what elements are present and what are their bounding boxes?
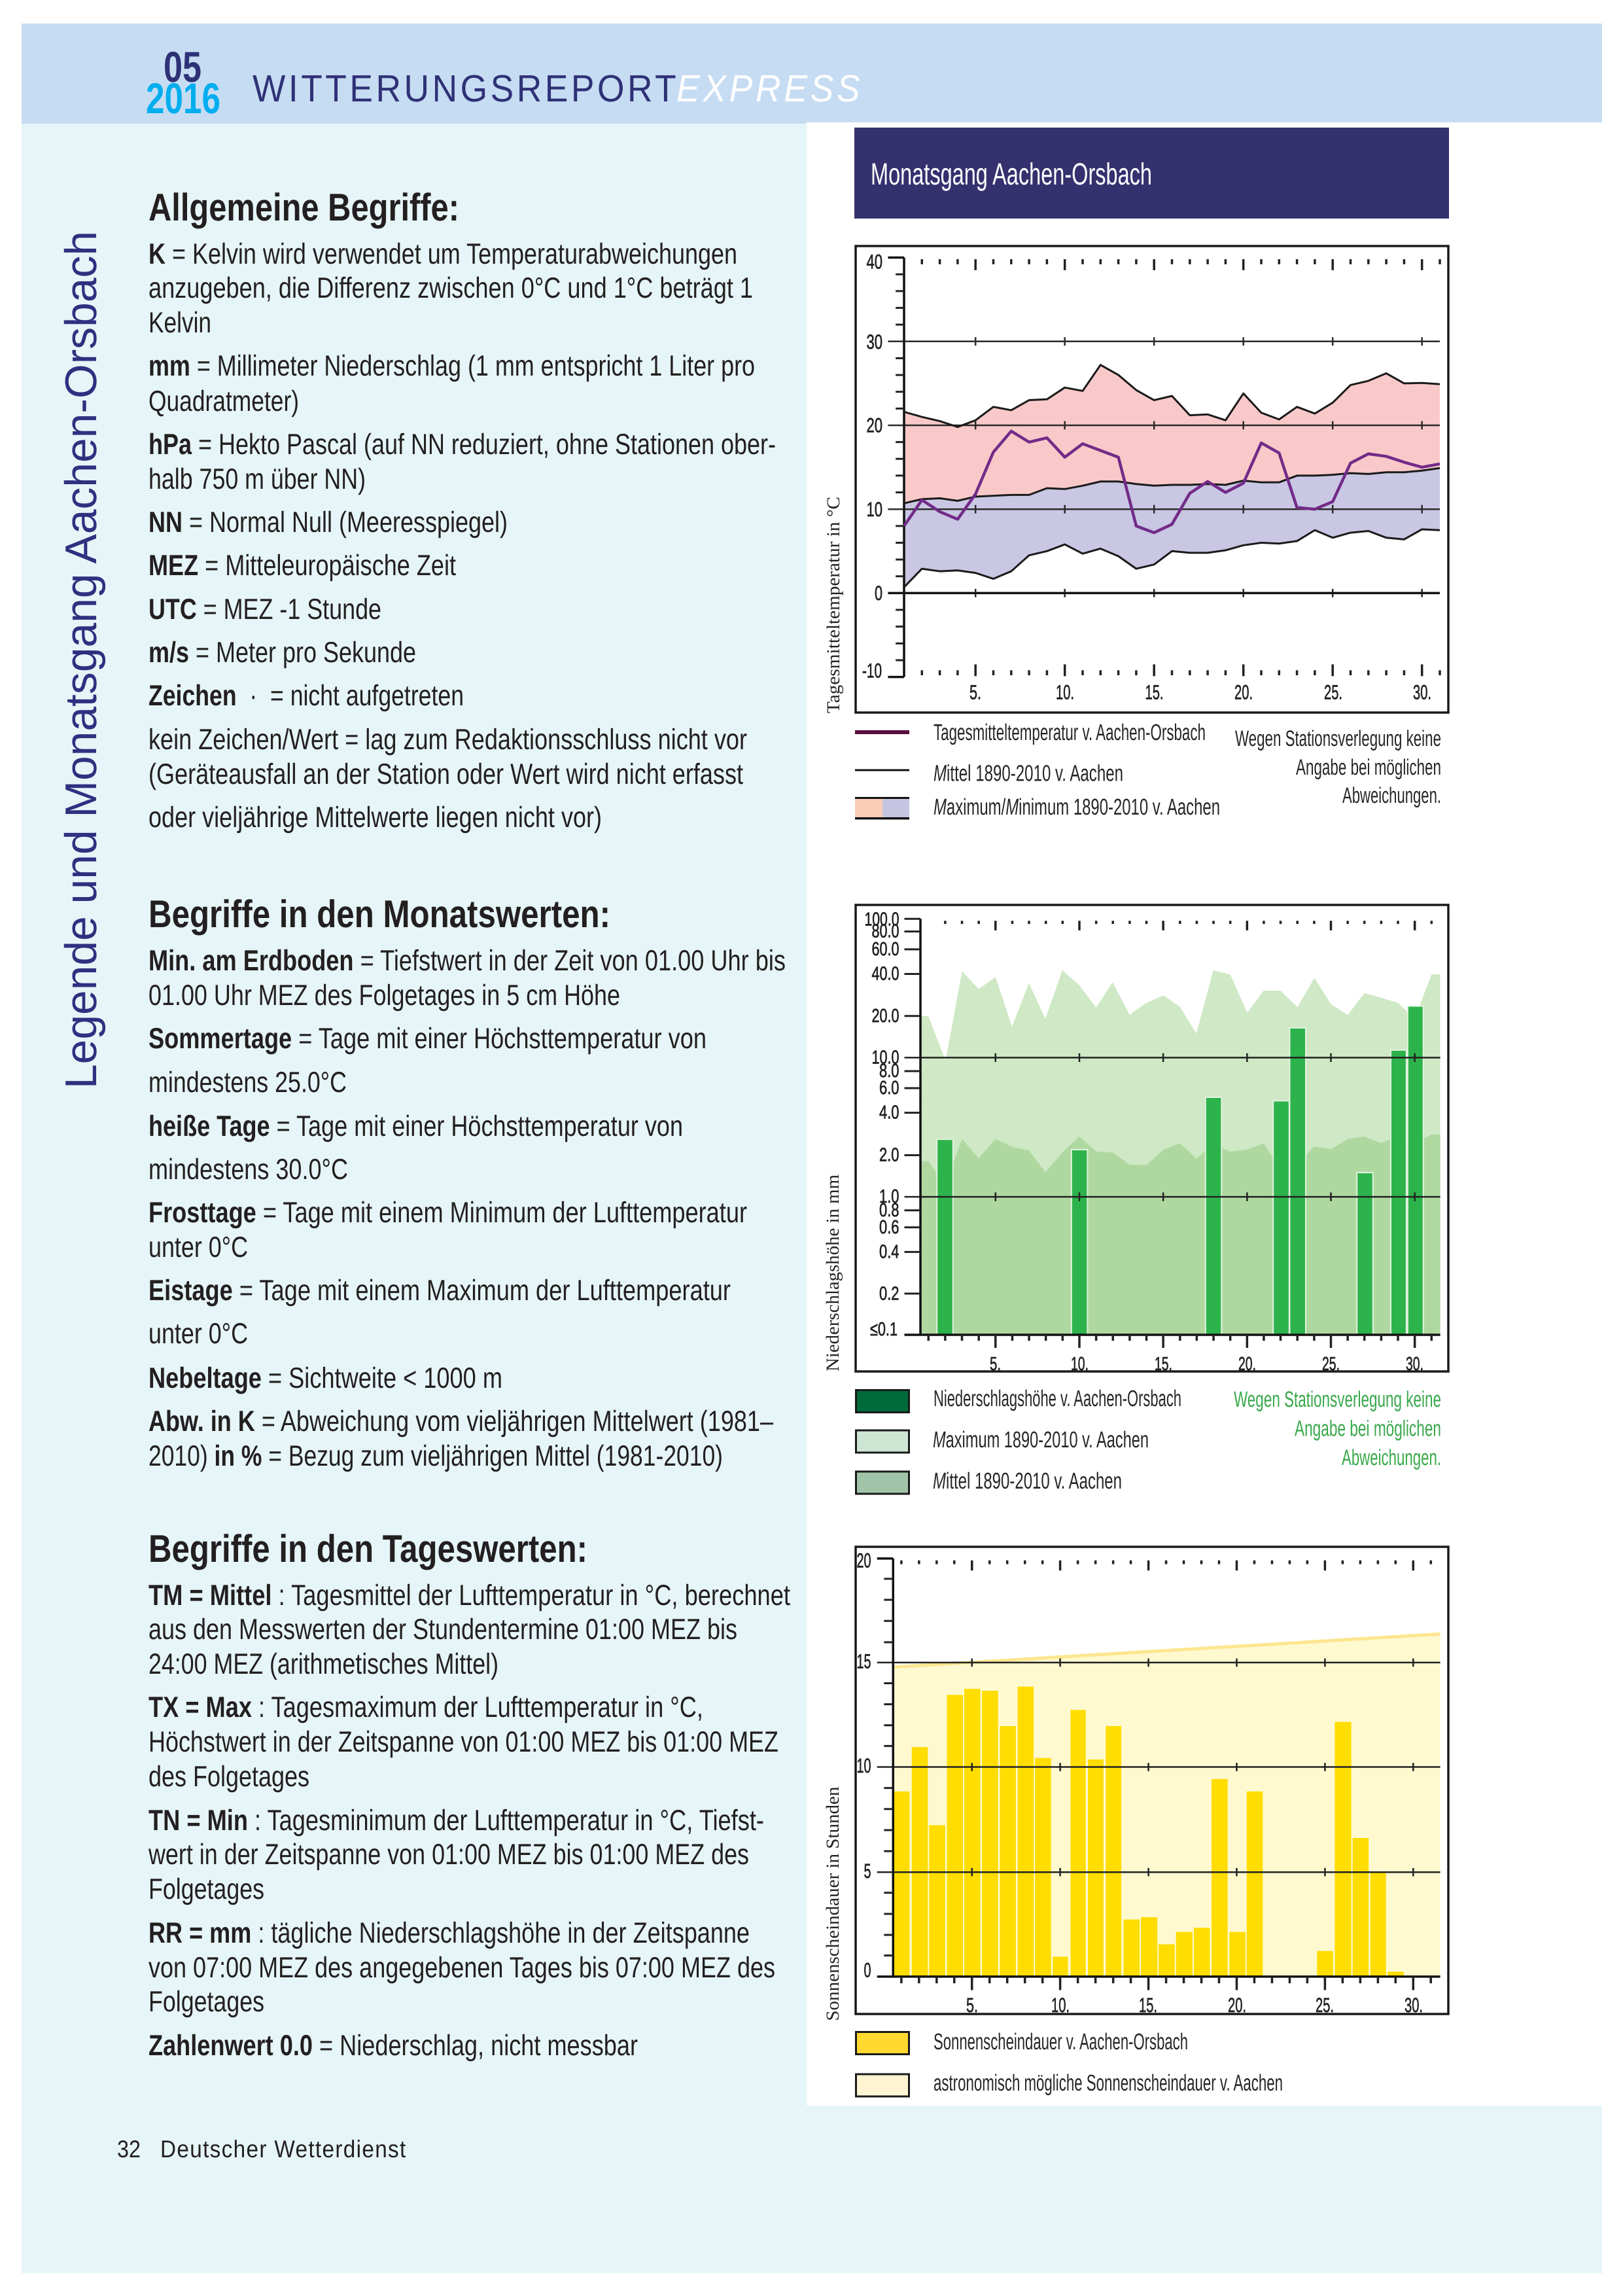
x axis labels — [966, 1994, 1423, 2017]
y axis labels: 20 — [866, 414, 882, 437]
chart: sunshine — [823, 1547, 1448, 2096]
precipitation plot — [904, 919, 1440, 1348]
x axis labels: 10. — [1051, 1994, 1070, 2017]
legend — [855, 720, 1220, 820]
definitions — [148, 1580, 791, 2062]
definitions: Eistage = Tage mit einem Maximum der Lufttemperatur — [148, 1275, 731, 1307]
heading: Begriffe in den Monatswerten: — [148, 892, 610, 936]
legend — [856, 2029, 1283, 2096]
y axis labels: 80.0 — [871, 921, 899, 942]
y axis labels: 0.4 — [879, 1241, 899, 1262]
x axis labels: 5. — [969, 681, 981, 704]
definitions: m/s = Meter pro Sekunde — [148, 637, 416, 669]
y axis labels: 0.6 — [879, 1217, 899, 1238]
y axis labels: 20.0 — [871, 1006, 899, 1027]
definitions: Quadratmeter) — [148, 385, 299, 417]
definitions: halb 750 m über NN) — [148, 463, 366, 495]
x axis labels: 30. — [1405, 1994, 1423, 2017]
y axis labels: 40.0 — [871, 964, 899, 985]
panel: begriffe in den monatswerten — [148, 892, 786, 1472]
definitions: Nebeltage = Sichtweite < 1000 m — [148, 1362, 502, 1394]
vertical side title: Legende und Monatsgang Aachen-Orsbach — [56, 231, 106, 1089]
legend: Mittel 1890-2010 v. Aachen — [933, 1468, 1122, 1494]
issue year: 2016 — [146, 74, 220, 122]
y axis labels: 4.0 — [879, 1103, 899, 1123]
y axis labels — [865, 910, 899, 1340]
x axis labels: 15. — [1145, 681, 1163, 704]
definitions: anzugeben, die Differenz zwischen 0°C und 1°C beträgt 1 — [148, 272, 753, 304]
definitions: des Folgetages — [148, 1761, 309, 1793]
definitions: TM = Mittel : Tagesmittel der Lufttemperatur in °C, berechnet — [148, 1580, 791, 1612]
legend: Maximum/Minimum 1890-2010 v. Aachen — [934, 794, 1220, 820]
y axis labels: 0.2 — [879, 1284, 899, 1305]
legend — [856, 1386, 1181, 1494]
legend: Sonnenscheindauer v. Aachen-Orsbach — [934, 2029, 1188, 2055]
temperature plot — [888, 258, 1440, 677]
y axis labels: 100.0 — [865, 910, 899, 930]
definitions: Abw. in K = Abweichung vom vieljährigen Mittelwert (1981– — [148, 1405, 773, 1438]
x axis labels: 30. — [1406, 1354, 1423, 1375]
maximum band — [904, 365, 1440, 593]
y axis labels: -10 — [862, 660, 882, 682]
definitions: von 07:00 MEZ des angegebenen Tages bis 07:00 MEZ des — [148, 1952, 775, 1984]
definitions: mm = Millimeter Niederschlag (1 mm entspricht 1 Liter pro — [148, 350, 755, 382]
sunshine bars — [893, 1687, 1404, 1977]
y axis labels: ≤0.1 — [870, 1319, 898, 1340]
note — [1235, 726, 1441, 808]
y axis labels: 10 — [857, 1754, 871, 1777]
y axis labels: 60.0 — [871, 939, 899, 960]
definitions: unter 0°C — [148, 1231, 248, 1263]
definitions: mindestens 25.0°C — [148, 1067, 347, 1099]
report title: WITTERUNGSREPORT — [253, 67, 676, 110]
definitions: kein Zeichen/Wert = lag zum Redaktionsschluss nicht vor — [148, 724, 747, 756]
mean area — [920, 1135, 1440, 1335]
definitions: Kelvin — [148, 307, 211, 339]
x axis labels: 25. — [1324, 681, 1342, 704]
definitions: unter 0°C — [148, 1318, 248, 1350]
legend: Maximum 1890-2010 v. Aachen — [933, 1427, 1149, 1453]
y axis title: Tagesmitteltemperatur in °C — [824, 497, 844, 713]
panel: charts column — [807, 122, 1602, 2106]
definitions: UTC = MEZ -1 Stunde — [148, 593, 381, 626]
definitions: RR = mm : tägliche Niederschlagshöhe in der Zeitspanne — [148, 1917, 750, 1949]
x axis labels: 25. — [1316, 1994, 1334, 2017]
heading: Begriffe in den Tageswerten: — [148, 1527, 587, 1570]
y axis title: Niederschlagshöhe in mm — [823, 1174, 843, 1371]
y axis labels: 8.0 — [879, 1061, 899, 1082]
note — [1234, 1387, 1441, 1470]
y axis labels — [857, 1549, 871, 1981]
chart: precipitation — [823, 905, 1448, 1494]
definitions: Frosttage = Tage mit einem Minimum der Lufttemperatur — [148, 1197, 747, 1229]
sunshine plot — [877, 1559, 1440, 1990]
x axis labels: 20. — [1238, 1354, 1256, 1375]
panel: allgemeine begriffe — [148, 186, 776, 834]
x axis labels: 15. — [1155, 1354, 1172, 1375]
y axis labels: 0.8 — [879, 1200, 899, 1221]
long-term mean, max and min lines — [904, 365, 1440, 587]
x axis labels — [990, 1354, 1423, 1375]
definitions: NN = Normal Null (Meeresspiegel) — [148, 506, 508, 539]
grid lines and ticks — [877, 1659, 1440, 1877]
x axis labels — [969, 681, 1431, 704]
astronomically possible area — [893, 1634, 1440, 1977]
y axis labels: 40 — [866, 251, 882, 274]
x axis labels: 10. — [1056, 681, 1074, 704]
maximum area — [920, 970, 1440, 1335]
definitions: 2010) in % = Bezug zum vieljährigen Mittel (1981-2010) — [148, 1440, 723, 1472]
chart heading bar — [854, 128, 1449, 219]
note: Angabe bei möglichen — [1295, 1416, 1441, 1441]
header band — [22, 24, 1602, 124]
y axis labels — [862, 251, 882, 682]
y axis labels: 10 — [866, 498, 882, 521]
legend: Niederschlagshöhe v. Aachen-Orsbach — [934, 1386, 1181, 1411]
chart heading bar: Monatsgang Aachen-Orsbach — [871, 156, 1152, 191]
definitions: heiße Tage = Tage mit einer Höchsttemperatur von — [148, 1110, 683, 1142]
x axis labels: 15. — [1139, 1994, 1157, 2017]
definitions: 24:00 MEZ (arithmetisches Mittel) — [148, 1648, 498, 1680]
note: Wegen Stationsverlegung keine — [1234, 1387, 1441, 1412]
definitions: (Geräteausfall an der Station oder Wert wird nicht erfasst — [148, 758, 744, 790]
chart: temperature — [824, 246, 1448, 820]
definitions: Folgetages — [148, 1873, 264, 1905]
y axis labels: 0 — [875, 582, 882, 605]
x axis labels: 5. — [966, 1994, 978, 2017]
definitions: Zahlenwert 0.0 = Niederschlag, nicht messbar — [148, 2030, 638, 2062]
legend: astronomisch mögliche Sonnenscheindauer v. Aachen — [934, 2070, 1283, 2096]
footer: Deutscher Wetterdienst — [160, 2136, 406, 2163]
y axis labels: 10.0 — [871, 1047, 899, 1068]
y axis labels: 1.0 — [879, 1186, 899, 1207]
definitions: aus den Messwerten der Stundentermine 01:00 MEZ bis — [148, 1614, 737, 1646]
definitions: Sommertage = Tage mit einer Höchsttemperatur von — [148, 1023, 707, 1055]
definitions: TX = Max : Tagesmaximum der Lufttemperatur in °C, — [148, 1691, 703, 1723]
definitions: Zeichen · = nicht aufgetreten — [148, 680, 464, 712]
definitions: MEZ = Mitteleuropäische Zeit — [148, 550, 457, 582]
x axis labels: 30. — [1413, 681, 1431, 704]
definitions — [148, 238, 776, 834]
x axis labels: 5. — [990, 1354, 1001, 1375]
y axis labels: 15 — [857, 1650, 871, 1672]
definitions: wert in der Zeitspanne von 01:00 MEZ bis 01:00 MEZ des — [148, 1839, 749, 1871]
grid lines and ticks — [904, 1053, 1440, 1201]
note: Abweichungen. — [1342, 783, 1441, 808]
y axis labels: 5 — [864, 1860, 871, 1882]
issue month: 05 — [164, 43, 201, 91]
x axis labels: 25. — [1322, 1354, 1340, 1375]
definitions: Min. am Erdboden = Tiefstwert in der Zeit von 01.00 Uhr bis — [148, 945, 786, 977]
footer: 32 — [117, 2136, 141, 2163]
note: Abweichungen. — [1342, 1445, 1441, 1470]
definitions: Folgetages — [148, 1986, 264, 2018]
y axis labels: 0 — [864, 1958, 871, 1981]
definitions: 01.00 Uhr MEZ des Folgetages in 5 cm Höhe — [148, 980, 620, 1012]
definitions: hPa = Hekto Pascal (auf NN reduziert, ohne Stationen ober- — [148, 429, 776, 461]
definitions: oder vieljährige Mittelwerte liegen nicht vor) — [148, 802, 602, 834]
station daily mean line — [904, 431, 1440, 533]
precipitation bars — [937, 1006, 1423, 1335]
panel: begriffe in den tageswerten — [148, 1527, 791, 2062]
y axis labels: 20 — [857, 1549, 871, 1572]
note: Angabe bei möglichen — [1296, 755, 1441, 780]
y axis title: Sonnenscheindauer in Stunden — [823, 1787, 843, 2021]
x axis labels: 10. — [1071, 1354, 1089, 1375]
definitions: TN = Min : Tagesminimum der Lufttemperatur in °C, Tiefst- — [148, 1805, 764, 1837]
y axis labels: 30 — [866, 330, 882, 353]
y axis labels: 2.0 — [879, 1145, 899, 1166]
x axis labels: 20. — [1228, 1994, 1246, 2017]
definitions — [148, 945, 786, 1472]
definitions: mindestens 30.0°C — [148, 1154, 348, 1186]
definitions: Höchstwert in der Zeitspanne von 01:00 MEZ bis 01:00 MEZ — [148, 1726, 778, 1758]
legend: Tagesmitteltemperatur v. Aachen-Orsbach — [934, 720, 1206, 745]
definitions: K = Kelvin wird verwendet um Temperaturabweichungen — [148, 238, 737, 270]
legend: Mittel 1890-2010 v. Aachen — [934, 761, 1123, 786]
report title express: EXPRESS — [676, 67, 860, 110]
x axis labels: 20. — [1234, 681, 1253, 704]
minimum band — [904, 468, 1440, 593]
grid lines and ticks — [888, 337, 1440, 597]
heading: Allgemeine Begriffe: — [148, 186, 459, 229]
y axis labels: 6.0 — [879, 1078, 899, 1099]
note: Wegen Stationsverlegung keine — [1235, 726, 1441, 751]
